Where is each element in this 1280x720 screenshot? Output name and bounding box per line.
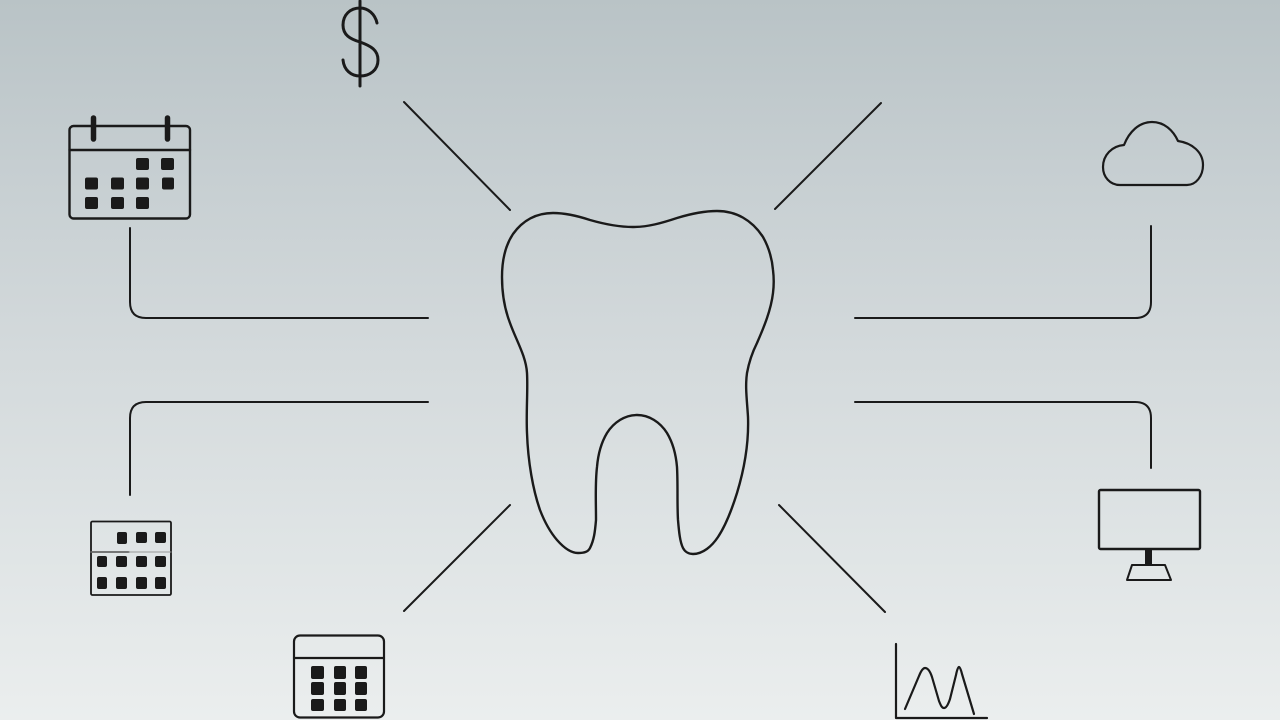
icon: calendar bottom left [294,636,384,718]
connector: bottom left diagonal [404,505,510,611]
connector: bottom right diagonal [779,505,885,612]
connector: lower right elbow [855,402,1151,468]
connector: top right diagonal [775,103,881,209]
icon: dollar sign [343,1,378,86]
connector: upper right elbow [855,226,1151,318]
icon: monitor [1099,490,1200,580]
icon: line chart [896,644,987,718]
icon: cloud [1103,122,1203,185]
connector: lower left elbow [130,402,428,495]
icon: calendar upper left [70,118,190,218]
icon: calendar lower left [91,522,171,595]
connector: upper left elbow [130,228,428,318]
icon: tooth outline [502,211,774,554]
connector: top left diagonal [404,102,510,210]
